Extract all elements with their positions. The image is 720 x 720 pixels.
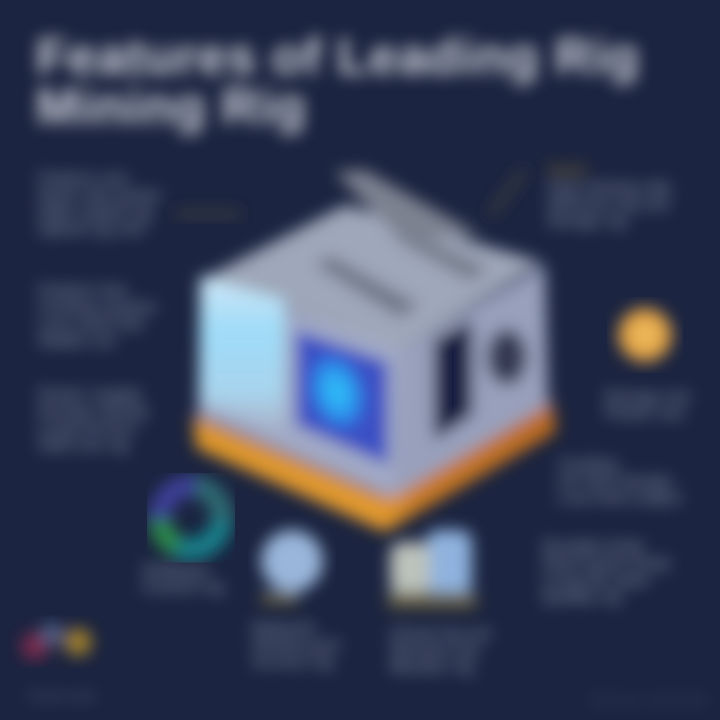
text block: right label under sun icon: Power use <box>605 405 685 422</box>
text block: right label under sun icon: Energy use <box>605 388 691 405</box>
top stripe 2 <box>395 230 490 282</box>
coin icon <box>21 623 92 660</box>
text block: left feature 2 <box>34 279 159 354</box>
text block: left feature 2: Stable run <box>38 333 116 350</box>
text block: bottom right label: Source site link <box>590 692 708 709</box>
text block: top right label: Fast mining rate <box>548 179 672 196</box>
text block: right label 3: Long life span <box>542 572 650 589</box>
text block: cloud icon label: Cloud rig use <box>390 625 492 642</box>
text block: cloud icon label: Monitor rig <box>390 659 474 676</box>
text block: left feature 3: Power supply <box>38 386 142 403</box>
text block: right label 2: Cooling <box>558 456 618 473</box>
text block: left feature 1: Speed rig unit <box>38 221 145 238</box>
text block: left feature 1: High output rig <box>38 204 153 221</box>
text block: right label 2: Air flow design <box>558 473 673 490</box>
small dark slot <box>487 329 527 385</box>
text block: left feature 2: Low noise fan <box>38 316 145 333</box>
rig illustration <box>193 170 556 532</box>
left face <box>198 278 402 498</box>
text block: left feature 3: Energy saving <box>38 403 147 420</box>
text block: right label under sun icon <box>600 384 694 425</box>
text block: globe icon label: Access rig <box>252 654 333 671</box>
text block: left feature 3 <box>33 382 152 458</box>
text block: right label 3: Quality rig <box>542 589 621 606</box>
dark slot <box>434 320 472 440</box>
top back fin <box>335 170 480 240</box>
title: Features of Leading Rig Mining Rig <box>36 28 640 135</box>
text block: globe icon label <box>248 616 343 674</box>
text block: right label 3 <box>537 534 674 610</box>
top face <box>205 205 542 350</box>
blue glow <box>301 348 373 436</box>
text block: ring icon label: Software <box>142 562 210 579</box>
text block: left feature 3: Long service <box>38 420 137 437</box>
orange base <box>193 400 556 532</box>
ring icon <box>160 486 222 549</box>
text block: cloud icon label: Remote use <box>390 642 481 659</box>
text block: ring icon label <box>138 558 228 600</box>
text block: left feature 2: Feature two <box>38 282 128 299</box>
text block: top right label: Design rig <box>548 213 626 230</box>
text block: ring icon label: Control rig <box>142 579 224 596</box>
text block: top right label: Hash <box>548 162 587 179</box>
cloud icon <box>388 530 476 608</box>
text block: globe icon label: Global pool <box>252 637 340 654</box>
blue panel frame <box>296 330 388 465</box>
top stripe 1 <box>315 255 420 318</box>
text block: left feature 3: Safe use rig <box>38 437 129 454</box>
text block: left feature 1: Hash rate power <box>38 187 162 204</box>
text block: bottom left label: Cost use <box>28 688 96 705</box>
text block: right label 2: Low heat output <box>558 490 682 507</box>
text block: left feature 2: Cooling system <box>38 299 157 316</box>
text block: right label 3: Durable body <box>542 538 644 555</box>
text block: top right label: Efficient rig unit <box>548 196 670 213</box>
text block: globe icon label: Network <box>252 620 315 637</box>
right face <box>392 265 548 498</box>
connector lines <box>175 170 525 215</box>
globe icon <box>261 530 323 604</box>
light blue panel <box>200 276 284 430</box>
text block: cloud icon label <box>384 622 494 680</box>
sun icon <box>618 308 672 362</box>
text block: left feature 1 <box>33 167 164 242</box>
text block: left feature 1: Feature one <box>38 170 129 187</box>
text block: right label 2 <box>554 452 684 512</box>
text block: top right label <box>542 159 675 235</box>
text block: right label 3: Steel frame body <box>542 555 671 572</box>
